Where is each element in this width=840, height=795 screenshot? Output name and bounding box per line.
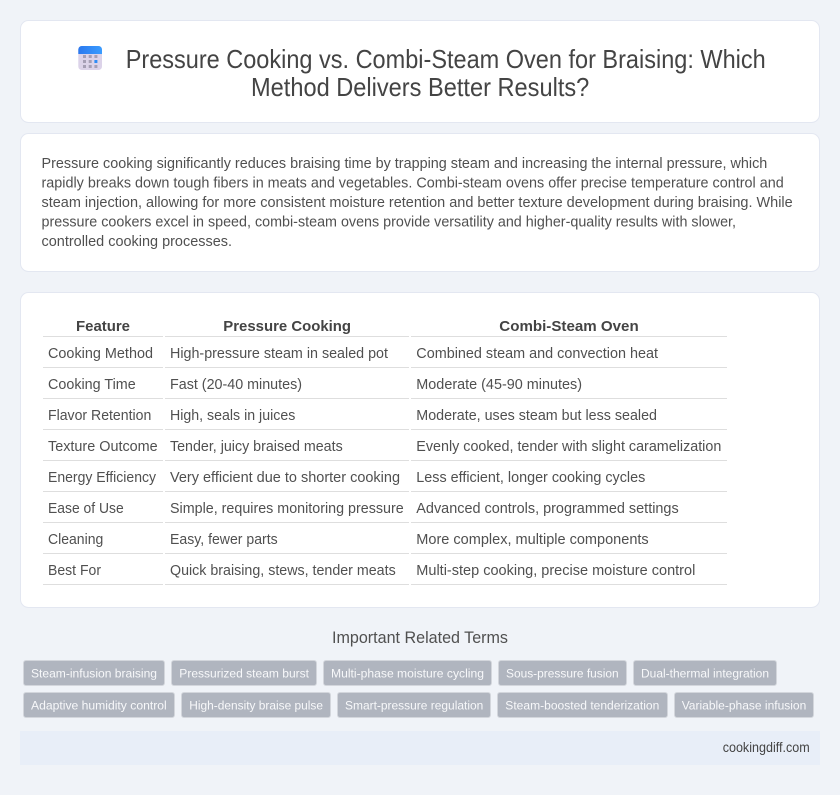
row: cooking method: High-pressure steam in sealed pot [170,346,388,362]
row: texture outcome: Evenly cooked, tender with slight caramelization [416,439,721,455]
panel: comparison table [20,292,820,608]
row: cooking time [43,377,727,399]
row: cooking method: Combined steam and convection heat [416,346,658,362]
tag: High-density braise pulse [189,698,323,712]
tag [172,660,316,686]
title [126,46,766,102]
row: best for [43,563,727,585]
table header: Feature [76,318,130,335]
row: ease of use: Simple, requires monitoring pressure [170,501,404,517]
tag: Adaptive humidity control [31,698,167,712]
summary text [42,156,793,250]
row: cooking method [43,346,727,368]
row: ease of use: Ease of Use [48,501,124,517]
row: energy efficiency: Very efficient due to shorter cooking [170,470,400,486]
tag: Variable-phase infusion [682,698,806,712]
row: flavor retention: High, seals in juices [170,408,295,424]
row: flavor retention: Flavor Retention [48,408,151,424]
tag [324,660,492,686]
row: texture outcome [43,439,727,461]
row: flavor retention [43,408,727,430]
tag [24,692,174,718]
tag [498,660,626,686]
summary text: rapidly breaks down tough fibers in meats and vegetables. Combi-steam ovens offer precise temperature control and [42,176,784,192]
row: cleaning: More complex, multiple components [416,532,649,548]
tag [498,692,668,718]
panel: title header [20,20,820,122]
icon: calendar [78,46,102,70]
row: cooking time: Cooking Time [48,377,136,393]
tag [338,692,490,718]
row: cleaning [43,532,727,554]
table header: Combi-Steam Oven [499,318,639,335]
row: best for: Quick braising, stews, tender meats [170,563,396,579]
table header [43,318,727,337]
footer [20,731,820,765]
row: best for: Multi-step cooking, precise moisture control [416,563,695,579]
row: cooking time: Fast (20-40 minutes) [170,377,302,393]
title: Method Delivers Better Results? [251,74,589,102]
row: ease of use: Advanced controls, programmed settings [416,501,679,517]
summary text: controlled cooking processes. [42,234,232,250]
row: energy efficiency: Less efficient, longer cooking cycles [416,470,645,486]
title: Pressure Cooking vs. Combi-Steam Oven for Braising: Which [126,46,766,74]
row: texture outcome: Texture Outcome [48,439,158,455]
row: energy efficiency [43,470,727,492]
row: texture outcome: Tender, juicy braised meats [170,439,343,455]
tag: Multi-phase moisture cycling [331,666,484,680]
tag: Smart-pressure regulation [345,698,483,712]
row: cooking method: Cooking Method [48,346,153,362]
tag: Pressurized steam burst [179,666,310,680]
row: cooking time: Moderate (45-90 minutes) [416,377,582,393]
summary text: steam injection, allowing for more consistent moisture retention and better texture development during braising. While [42,195,793,211]
tag [634,660,776,686]
tag [24,660,164,686]
tag: Steam-infusion braising [31,666,157,680]
tag: Dual-thermal integration [641,666,769,680]
row: energy efficiency: Energy Efficiency [48,470,157,486]
summary text: pressure cookers excel in speed, combi-steam ovens provide versatility and higher-quality results with slower, [42,215,736,231]
row: ease of use [43,501,727,523]
footer: cookingdiff.com [723,740,810,755]
row: cleaning: Cleaning [48,532,103,548]
tag: Sous-pressure fusion [506,666,619,680]
panel: summary [20,134,820,272]
row: best for: Best For [48,563,101,579]
tag: Steam-boosted tenderization [505,698,659,712]
tag [674,692,814,718]
summary text: Pressure cooking significantly reduces braising time by trapping steam and increasing the internal pressure, which [42,156,767,172]
row: cleaning: Easy, fewer parts [170,532,278,548]
heading: related terms: Important Related Terms [332,629,508,647]
related term tags [24,660,814,718]
tag [182,692,330,718]
row: flavor retention: Moderate, uses steam but less sealed [416,408,657,424]
table header: Pressure Cooking [223,318,351,335]
